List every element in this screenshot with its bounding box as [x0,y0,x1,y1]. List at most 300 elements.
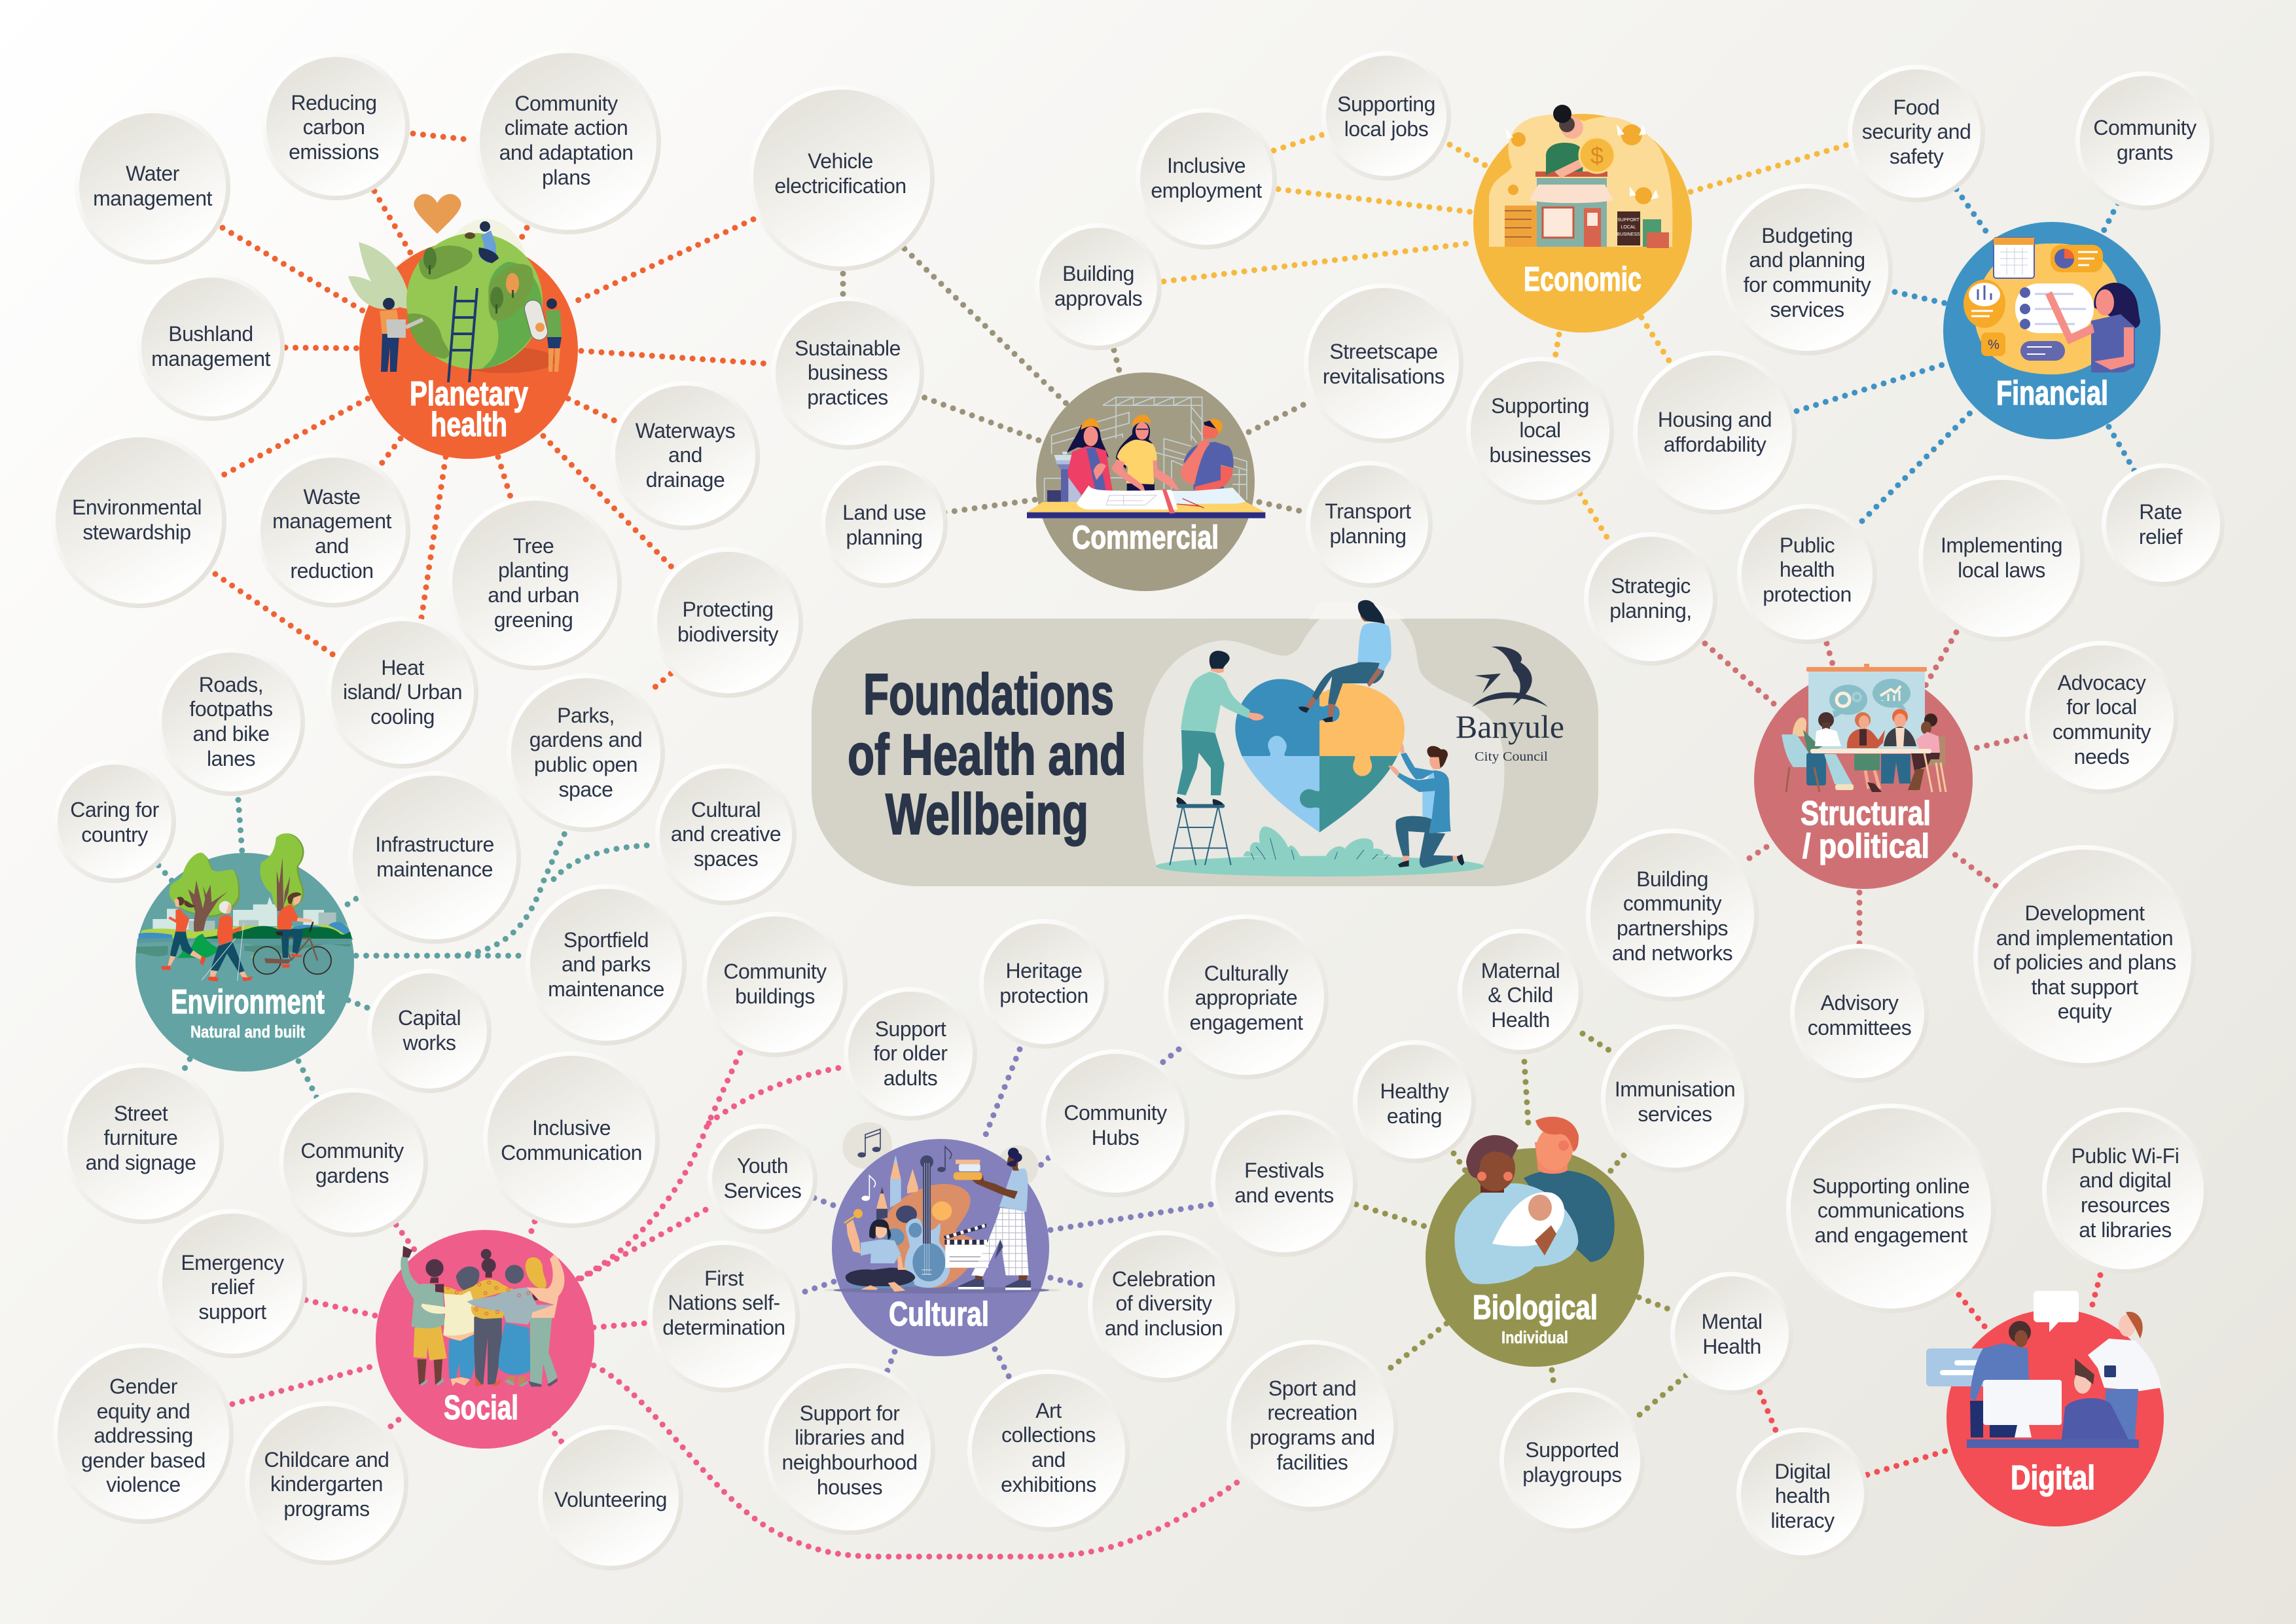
title [848,662,1126,846]
palette [883,1184,978,1288]
bubble: Reducing [291,91,377,115]
tower [1047,452,1081,503]
panel: Planetary health hub [348,194,578,459]
bubble [51,433,226,608]
bubble: and planning [1749,248,1865,272]
bubble: Supporting [1337,92,1435,116]
illustration: earth [406,233,556,382]
bubble: Community [2093,116,2197,139]
illustration: group hug from behind [401,1246,565,1386]
bubble [526,884,687,1045]
illustration backdrop: note bubble and ground [825,1114,1060,1293]
bubble: Advisory [1821,991,1898,1015]
bubble: Celebration [1112,1267,1215,1291]
label: Commercial [1072,519,1219,556]
bubble [1458,929,1583,1055]
bubble: community [2053,720,2151,744]
label: Structural [1801,795,1931,833]
bubble: Streetscape [1329,340,1438,363]
bubble: at libraries [2079,1218,2172,1242]
illustration: planning dashboard: % [1988,338,2000,352]
panel: Biological hub [1426,1117,1644,1367]
bubble: Services [724,1179,801,1202]
label: Environment [171,983,325,1021]
bubble: and inclusion [1105,1316,1223,1340]
bubble [1918,475,2085,641]
bubble: of diversity [1116,1291,1211,1315]
panel: Structural / political hub: / political [1803,827,1929,865]
bubble [2075,71,2214,210]
bubble: facilities [1277,1451,1348,1474]
bubble: and urban [488,583,579,607]
bubble: Heat [381,656,424,679]
label: Economic [1524,261,1641,298]
bubble [1973,845,2196,1068]
bubble: relief [211,1275,254,1299]
person 1 [1792,717,1806,736]
bubble: Advocacy [2058,671,2145,695]
bubble: and digital [2079,1168,2171,1192]
bubble [967,1369,1130,1532]
bubble: gardens [315,1164,389,1187]
connectors: financial [1797,189,2134,521]
bubble [844,987,977,1121]
bubble: neighbourhood [781,1451,918,1474]
figure: presenter [2045,283,2140,372]
bubble: Capital [398,1006,461,1030]
bubble [256,453,410,607]
logo: Banyule City Council: Banyule [1456,708,1564,745]
table and plans [1027,486,1265,518]
figure: woman with thermometer [522,298,562,372]
bubble: Bushland [168,322,253,346]
bubble: planning [1330,524,1406,548]
bubble: management [272,509,391,533]
bubble: furniture [104,1126,177,1149]
illustration: shop [1489,115,1672,248]
bubble: Roads, [199,673,263,696]
bubble: Community [300,1139,404,1163]
bubble: Community [1064,1101,1167,1125]
person 3 [1855,712,1871,728]
bubble: climate action [505,116,628,139]
bubble [1586,829,1759,1001]
bubble [1088,1231,1240,1382]
bubble: island/ Urban [343,680,462,704]
bubble: adults [884,1066,937,1090]
bubble: for community [1744,273,1871,297]
bubble: Public Wi-Fi [2072,1144,2179,1168]
bubble: houses [817,1475,882,1499]
bubble: & Child [1488,983,1553,1007]
bubble: of policies and plans [1993,950,2176,974]
bubble: appropriate [1195,986,1297,1009]
illustration: presentation board [1806,664,1927,749]
bubble: Implementing [1941,533,2062,557]
logo: Banyule City Council [1456,647,1564,764]
bubble: local laws [1958,558,2045,582]
bubble: Mental [1701,1310,1763,1333]
pencils [876,1155,918,1219]
illustration: arts [833,1147,1049,1293]
bubble: Building [1062,262,1134,285]
bubble: Community [514,92,618,115]
bubble: Protecting [682,598,774,621]
bubble [1601,1024,1749,1172]
label: Digital [2011,1459,2095,1497]
bubble: Public [1780,533,1835,557]
illustration: park scene [136,833,353,981]
bubble: needs [2074,745,2129,768]
bubble: Housing and [1658,408,1772,431]
icon: message card [1926,1348,1988,1386]
bubble: Hubs [1092,1126,1139,1149]
bubble: Waterways [636,419,735,442]
guitar [905,1155,950,1288]
bubble: Building [1636,867,1708,891]
bubble: Caring for [70,798,159,821]
illustration: shop: LOCAL [1621,225,1636,230]
bubble: for older [874,1041,947,1065]
label: Biological [1473,1289,1598,1327]
bubble: Sport and [1268,1377,1356,1400]
bubble: partnerships [1617,916,1728,940]
person 3 [435,1249,542,1386]
bubble: Supported [1525,1438,1619,1462]
title: of Health and [848,722,1126,787]
bubble: cooling [370,705,435,729]
bubble: Strategic [1611,574,1691,598]
bubble: Community [723,960,827,983]
bubble: Emergency [181,1251,284,1274]
illustration: planning dashboard [1964,238,2121,374]
bubble: Health [1702,1335,1761,1358]
bubble: collections [1001,1423,1096,1447]
bubble: determination [662,1316,785,1339]
bubble: libraries and [795,1426,905,1449]
bubble: playgroups [1522,1463,1622,1487]
bubble: services [1770,298,1844,321]
bubble: and [668,443,702,467]
illustration: shop: BUSINESS [1617,232,1640,237]
woman in red [1067,418,1113,496]
bubble: Sustainable [795,336,901,360]
landscape bands [136,922,353,956]
bubble [367,969,492,1093]
bubble: Gender [109,1375,177,1398]
bubble [63,1063,224,1224]
bubble [348,771,521,944]
bubble: and creative [671,822,781,846]
bubble [1041,1049,1189,1197]
label: Planetary [410,375,528,413]
bubble: practices [807,386,888,409]
bubble: and [315,534,349,558]
figure: walking man carrying books [954,1147,1031,1290]
bubble: eating [1387,1104,1442,1128]
bubble: carbon [303,115,365,139]
bubble: revitalisations [1323,365,1444,388]
bubble: greening [494,608,573,632]
bubble [1306,461,1433,588]
woman sitting on heart [1299,600,1391,722]
bubble: maintenance [548,977,664,1001]
bubble: Maternal [1481,959,1560,983]
bubble: and implementation [1996,926,2173,950]
bubble: Sportfield [564,928,649,952]
bubble [1164,914,1329,1079]
bubble [327,617,478,768]
logo: Banyule City Council: City Council [1475,749,1548,764]
person 2 [1818,712,1834,728]
title: Wellbeing [886,782,1088,846]
man in blue [1181,419,1234,496]
bubble: spaces [694,847,758,871]
bubble [507,674,665,832]
bubble: Street [114,1102,168,1125]
icon: heart [414,194,461,234]
bubble: grants [2117,141,2173,164]
bubble [1790,944,1929,1083]
bubble: Development [2024,901,2145,925]
bubble: Waste [304,485,360,509]
woman in yellow [1111,415,1179,492]
bubble: Childcare and [264,1448,389,1471]
panel: Financial hub [1943,222,2161,439]
bubble: approvals [1054,287,1142,310]
person 5 [1924,713,1937,727]
figure: jogger [161,897,206,970]
bubble: programs and [1249,1426,1375,1449]
bubble: biodiversity [677,623,778,646]
bubble: Art [1035,1399,1062,1422]
bubble: management [93,187,212,210]
bubble: health [1775,1484,1830,1507]
bubble [2042,1108,2208,1274]
bubble: resources [2081,1193,2170,1217]
panel: Environment hub: Natural and built [190,1022,305,1041]
bubble [979,919,1109,1049]
bubble: gender based [81,1449,206,1472]
bubble [75,109,230,264]
bubble: planting [498,558,569,582]
bubble: drainage [646,468,725,492]
bubble: Tree [513,534,554,558]
panel: Biological hub: Individual [1501,1327,1568,1347]
bubble: communications [1818,1199,1964,1222]
bubble [771,297,924,450]
bubble [1499,1388,1645,1533]
bubble: electricification [774,174,906,198]
bubble: Digital [1774,1460,1831,1483]
bubble [1211,1110,1357,1257]
person 2 [421,1267,479,1386]
bubble [653,547,803,698]
bubble: First [704,1267,744,1290]
sign board [1617,211,1640,245]
bubble [1848,65,1985,202]
bubble [1321,51,1451,181]
bubble [1633,351,1797,514]
bubble: and parks [562,952,651,976]
panel: Structural / political hub [1754,664,1973,889]
bubble: equity and [97,1399,190,1423]
bubble: exhibitions [1001,1473,1096,1496]
panel: Commercial hub [1027,372,1265,591]
bubble: Inclusive [1167,154,1246,177]
bubble: Inclusive [532,1116,611,1140]
panel: Planetary health hub: health [431,406,507,444]
bubble: and bike [192,722,269,746]
bubble: and adaptation [499,141,633,164]
bubble: reduction [290,559,374,583]
figure: walker with poles [202,901,253,981]
connectors: social [232,1053,1244,1557]
bicycle and rider [253,892,331,974]
bubble [2025,641,2178,794]
label: Social [444,1389,518,1427]
bubble: Health [1491,1008,1550,1032]
bubble: programs [283,1497,370,1521]
panel: Social hub [376,1230,594,1449]
connectors: cultural [798,1049,1211,1377]
bubble [2102,463,2225,586]
bubble: equity [2058,1000,2111,1023]
illustration: meeting table and people [1782,709,1946,792]
bubble [475,48,661,234]
bubble: for local [2066,695,2137,719]
bubble: protection [1763,583,1852,606]
skyline [152,897,336,931]
panel: Cultural hub [825,1114,1060,1356]
bubble: stewardship [82,520,191,544]
bubble [655,764,797,905]
bubble: Supporting online [1812,1174,1969,1198]
bubble: recreation [1267,1401,1357,1424]
bubble: Budgeting [1761,224,1853,247]
bubble: Youth [737,1154,788,1178]
bubble: protection [999,984,1088,1007]
bubble: safety [1890,145,1943,168]
bubble: and events [1234,1183,1334,1207]
bubble [821,461,948,588]
man kneeling [1388,744,1464,868]
bubble: that support [2032,975,2138,999]
illustration: construction team at a table [1027,397,1265,518]
bubble [1736,1428,1869,1560]
bubble: management [151,347,270,370]
bubble [1227,1340,1398,1511]
bubble [279,1088,428,1237]
bubble [1136,108,1277,249]
panel: Economic hub [1473,105,1692,333]
bubble: Land use [842,501,926,524]
bubble: and networks [1612,941,1732,965]
bubble: literacy [1770,1509,1835,1532]
illustration: office team [1967,1312,2161,1448]
bubble: Food [1893,96,1939,119]
icon: speech bubble [2034,1291,2079,1332]
bubble: Vehicle [808,149,873,173]
bubble: lanes [207,747,255,770]
bubble: services [1638,1102,1712,1126]
icon: leaf [348,242,410,310]
connectors: digital [1760,1275,2100,1475]
bubble [1466,357,1614,505]
bubble: Support for [800,1401,899,1425]
panel: Digital hub [1926,1291,2164,1526]
bubble: Parks, [557,704,615,727]
bubble [158,1209,307,1358]
bubble: and engagement [1814,1223,1967,1247]
clapperboard [944,1223,988,1268]
bubble [702,912,848,1057]
figure: seated woman with maraca [844,1209,915,1291]
bubble: addressing [94,1424,193,1447]
bubble [157,648,305,796]
bubble: Communication [501,1141,642,1164]
person 4 [1892,709,1908,725]
bubble: and signage [86,1151,196,1174]
bubble [1353,1040,1476,1163]
bubble: Rate [2139,500,2182,524]
bubble: Healthy [1380,1079,1449,1103]
bubble: local [1519,418,1561,442]
bubble [1584,532,1717,666]
bubble: local jobs [1344,117,1428,141]
person 5 [526,1254,565,1386]
bubble: committees [1808,1016,1911,1039]
bubble: emissions [289,140,379,164]
bubble: maintenance [376,857,493,881]
person 4 [467,1265,556,1386]
bubble: Transport [1325,499,1411,523]
bubble: Infrastructure [375,833,494,856]
illustration: parents and baby [1454,1117,1615,1284]
bubble: affordability [1664,433,1766,456]
bubble: planning [846,526,922,549]
figure: shopkeeper: $ [1590,142,1604,169]
icon: ladder [448,286,477,382]
bubble: businesses [1489,443,1591,467]
title: Foundations [863,662,1114,727]
connectors: economic [1164,135,1848,541]
bubble: kindergarten [270,1472,383,1496]
bubble: Immunisation [1615,1077,1735,1101]
figure: shopkeeper [1546,105,1615,178]
bubble: violence [106,1473,181,1496]
panel: Environment hub [135,833,354,1072]
bubble: business [808,361,888,384]
bubble [611,381,760,530]
connectors: biological [1356,1034,1686,1420]
bubble [764,1363,935,1535]
bubble: Volunteering [554,1488,667,1511]
bubble: support [198,1300,266,1324]
bubble: community [1623,892,1721,915]
bubble [137,273,285,421]
illustration: shop: SUPPORT [1617,218,1640,223]
bubble [245,1401,408,1565]
trees [169,833,304,944]
shirt dots [446,1281,529,1315]
bubble [53,760,176,883]
bubble [648,1240,800,1392]
bubble: Environmental [72,496,202,519]
bubble: Support [875,1017,946,1041]
bubble [53,1343,234,1524]
bubble: Culturally [1204,962,1288,985]
